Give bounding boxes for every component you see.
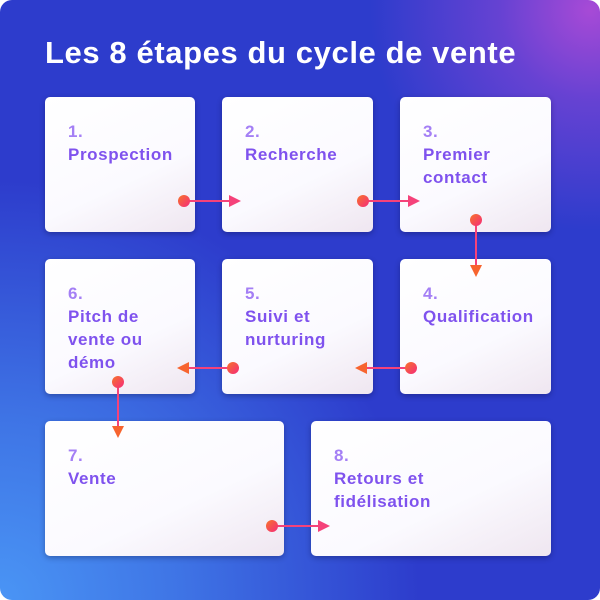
card 7 <box>45 421 284 556</box>
card 2: 2. <box>245 122 260 141</box>
card 4 <box>400 259 551 394</box>
card 3 <box>400 97 551 232</box>
card 5: Suivi et <box>245 307 310 326</box>
card 1: Prospection <box>68 145 173 164</box>
card 6: vente ou <box>68 330 143 349</box>
title: Les 8 étapes du cycle de vente <box>45 35 516 70</box>
card 5 <box>222 259 373 394</box>
card 8 <box>311 421 551 556</box>
card 6: 6. <box>68 284 83 303</box>
card 8: 8. <box>334 446 349 465</box>
card 8: Retours et <box>334 469 424 488</box>
card 7: Vente <box>68 469 116 488</box>
card 6: démo <box>68 353 116 372</box>
arrow 4-5 <box>355 362 417 374</box>
card 2: Recherche <box>245 145 337 164</box>
card 5: 5. <box>245 284 260 303</box>
card 4: Qualification <box>423 307 534 326</box>
card 3: Premier <box>423 145 491 164</box>
arrow 5-6 <box>177 362 239 374</box>
card 6: Pitch de <box>68 307 139 326</box>
card 6 <box>45 259 195 394</box>
arrow 2-3 <box>357 195 420 207</box>
arrow 7-8 <box>266 520 330 532</box>
card 3: 3. <box>423 122 438 141</box>
card 5: nurturing <box>245 330 326 349</box>
card 3: contact <box>423 168 488 187</box>
card 1 <box>45 97 195 232</box>
arrow 6-7 <box>112 376 124 438</box>
card 4: 4. <box>423 284 438 303</box>
arrow 1-2 <box>178 195 241 207</box>
arrow 3-4 <box>470 214 482 277</box>
card 1: 1. <box>68 122 83 141</box>
card 8: fidélisation <box>334 492 431 511</box>
card 7: 7. <box>68 446 83 465</box>
card 2 <box>222 97 373 232</box>
